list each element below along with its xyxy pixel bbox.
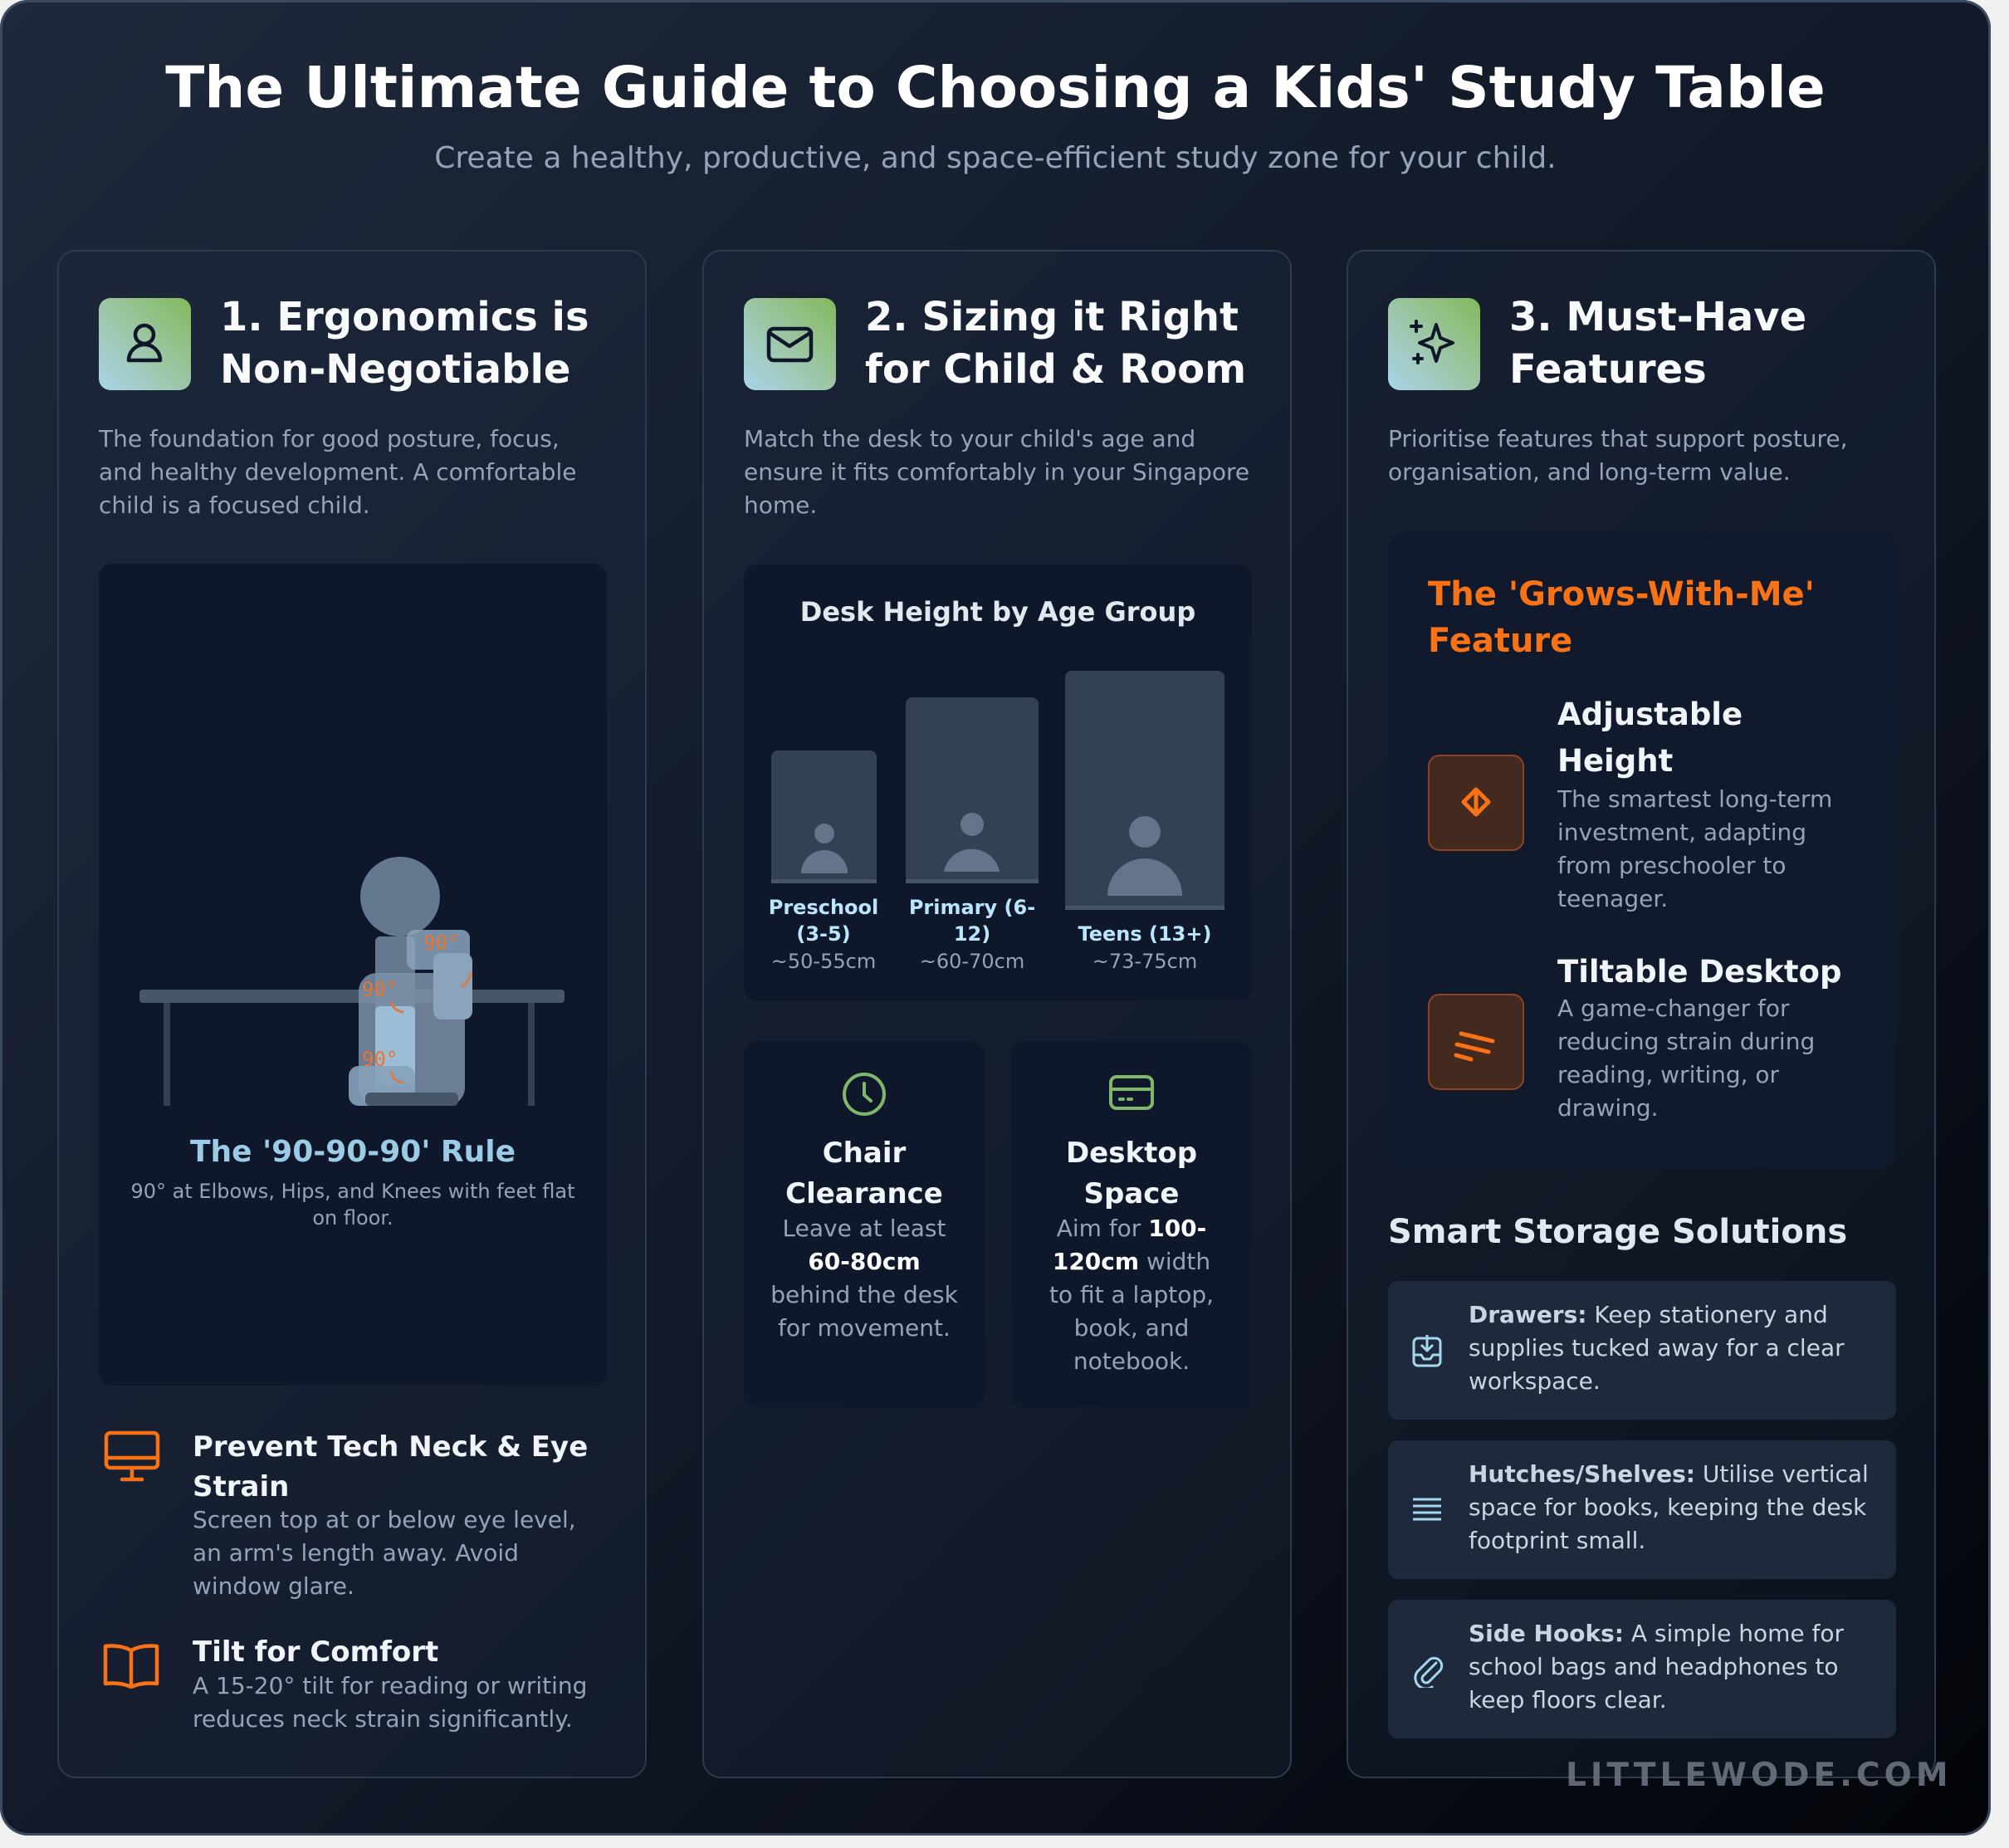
card: chair clearance: Chair (823, 1137, 906, 1170)
card: chair clearance: Leave at least (783, 1215, 946, 1242)
feature: adjustable height: Height (1557, 743, 1673, 779)
storage: hutches: space for books, keeping the desk (1469, 1494, 1866, 1521)
feature: adjustable height: Adjustable (1557, 697, 1743, 732)
bar chart: desk height by age: Primary (6- (909, 896, 1035, 919)
bar chart: desk height by age: 12) (954, 922, 990, 946)
icon: lines (1413, 1498, 1441, 1521)
icon: monitor (105, 1431, 159, 1481)
icon: card (1109, 1075, 1154, 1110)
bar chart: desk height by age: ~50-55cm (771, 950, 876, 973)
feature: adjustable height (1428, 697, 1832, 912)
tip: tilt: reduces neck strain significantly. (193, 1705, 573, 1733)
card: chair clearance (744, 1041, 985, 1407)
rule caption (131, 1180, 574, 1230)
feature: tiltable desktop: reading, writing, or (1557, 1061, 1779, 1088)
bar labels: (3-5) (796, 922, 851, 946)
rule title: The '90-90-90' Rule (190, 1135, 516, 1169)
storage: hutches (1388, 1440, 1896, 1579)
heading: 1. Ergonomics is (220, 294, 589, 340)
tip: tech neck: window glare. (193, 1572, 354, 1600)
watermark: LITTLEWODE.COM (1566, 1757, 1953, 1794)
description: The foundation for good posture, focus, (99, 425, 560, 452)
description (744, 425, 1249, 519)
description: and healthy development. A comfortable (99, 458, 576, 486)
storage: side hooks (1388, 1600, 1896, 1738)
icon: clock (843, 1073, 886, 1116)
bar chart: desk height by age (744, 565, 1252, 1001)
title: The Ultimate Guide to Choosing a Kids' Study Table (165, 55, 1826, 121)
subtitle: Create a healthy, productive, and space-efficient study zone for your child. (434, 141, 1557, 175)
card: desktop space: notebook. (1073, 1347, 1190, 1375)
description: Prioritise features that support posture, (1388, 425, 1848, 452)
diagram: child at desk: 90° (362, 1048, 398, 1071)
tip: tech neck (105, 1430, 588, 1600)
feature: tiltable desktop: Tiltable Desktop (1557, 954, 1841, 990)
icon: diamond (1428, 755, 1524, 851)
card: desktop space: book, and (1074, 1314, 1189, 1342)
bar chart: desk height by age: ~73-75cm (1092, 950, 1197, 973)
illustration: 90-90-90 rule (99, 564, 607, 1386)
heading: 3. Must-Have (1509, 294, 1806, 340)
feature: tiltable desktop: drawing. (1557, 1094, 1659, 1122)
panel: features (1347, 250, 1936, 1778)
callout: grows-with-me: Feature (1428, 622, 1572, 660)
card: desktop space (1011, 1041, 1252, 1407)
storage: drawers (1388, 1281, 1896, 1420)
storage: drawers: supplies tucked away for a clear (1469, 1334, 1845, 1362)
icon: person (99, 298, 191, 390)
feature: tiltable desktop: reducing strain during (1557, 1028, 1815, 1055)
icon: mail (744, 298, 836, 390)
bar chart: desk height by age: ~60-70cm (920, 950, 1024, 973)
card: desktop space: 120cm width (1053, 1248, 1210, 1275)
heading (865, 294, 1246, 393)
panel: ergonomics (57, 250, 647, 1778)
description: home. (744, 491, 817, 519)
tip: tech neck: Prevent Tech Neck & Eye (193, 1430, 588, 1464)
feature: adjustable height: The smartest long-term (1557, 785, 1832, 813)
feature: adjustable height: investment, adapting (1557, 819, 1806, 846)
storage: drawers: workspace. (1469, 1367, 1601, 1395)
card: desktop space: Desktop (1066, 1137, 1197, 1170)
heading: Non-Negotiable (220, 346, 570, 393)
tip: tilt (103, 1635, 587, 1733)
heading: smart storage: Smart Storage Solutions (1388, 1213, 1847, 1251)
heading: 2. Sizing it Right (865, 294, 1239, 340)
bar chart: desk height by age: Teens (13+) (1078, 922, 1211, 946)
card: chair clearance: 60-80cm (808, 1248, 921, 1275)
storage: hutches: Hutches/Shelves: Utilise vertical (1469, 1460, 1869, 1488)
heading (1509, 294, 1806, 393)
icon: tilt lines (1428, 994, 1524, 1090)
heading (220, 294, 589, 393)
icon: sparkles (1388, 298, 1480, 390)
storage: side hooks: keep floors clear. (1469, 1686, 1667, 1714)
storage: side hooks: school bags and headphones to (1469, 1653, 1839, 1680)
icon: book (103, 1644, 159, 1689)
diagram: child at desk: 90° (423, 931, 459, 955)
description: organisation, and long-term value. (1388, 458, 1791, 486)
description: child is a focused child. (99, 491, 370, 519)
panel: sizing (702, 250, 1292, 1778)
feature: adjustable height: from preschooler to (1557, 852, 1786, 879)
card: desktop space: Space (1084, 1177, 1179, 1210)
feature: tiltable desktop: A game-changer for (1557, 995, 1790, 1022)
tip: tilt: A 15-20° tilt for reading or writing (193, 1672, 587, 1699)
card: chair clearance: for movement. (778, 1314, 951, 1342)
rule caption: 90° at Elbows, Hips, and Knees with feet flat (131, 1180, 574, 1203)
heading: for Child & Room (865, 346, 1246, 393)
tip: tech neck: Strain (193, 1470, 289, 1503)
feature: adjustable height: teenager. (1557, 885, 1668, 912)
feature: tiltable desktop (1428, 954, 1841, 1122)
diagram: child at desk (139, 857, 565, 1106)
bar labels: Preschool (769, 896, 878, 919)
storage: drawers: Drawers: Keep stationery and (1469, 1301, 1828, 1328)
tip: tilt: Tilt for Comfort (193, 1635, 438, 1669)
icon: paperclip (1414, 1657, 1443, 1688)
rule caption: on floor. (312, 1206, 393, 1230)
description: Match the desk to your child's age and (744, 425, 1195, 452)
description (1388, 425, 1848, 486)
icon: inbox (1413, 1335, 1441, 1366)
callout: grows-with-me: The 'Grows-With-Me' (1428, 575, 1815, 614)
bar labels (769, 896, 878, 946)
description (98, 425, 576, 519)
chart title: Desk Height by Age Group (800, 596, 1195, 628)
tip: tech neck: Screen top at or below eye level, (193, 1506, 576, 1533)
card: desktop space: Aim for 100- (1057, 1215, 1206, 1242)
diagram: child at desk: 90° (362, 978, 398, 1001)
description: ensure it fits comfortably in your Singapore (744, 458, 1249, 486)
tip: tech neck: an arm's length away. Avoid (193, 1539, 519, 1567)
storage: side hooks: Side Hooks: A simple home for (1469, 1620, 1844, 1647)
bars (771, 750, 877, 883)
callout: grows-with-me (1388, 532, 1896, 1168)
card: chair clearance: behind the desk (770, 1281, 958, 1308)
card: desktop space: to fit a laptop, (1049, 1281, 1214, 1308)
heading: Features (1509, 346, 1707, 393)
card: chair clearance: Clearance (785, 1177, 943, 1210)
storage: hutches: footprint small. (1469, 1527, 1645, 1554)
